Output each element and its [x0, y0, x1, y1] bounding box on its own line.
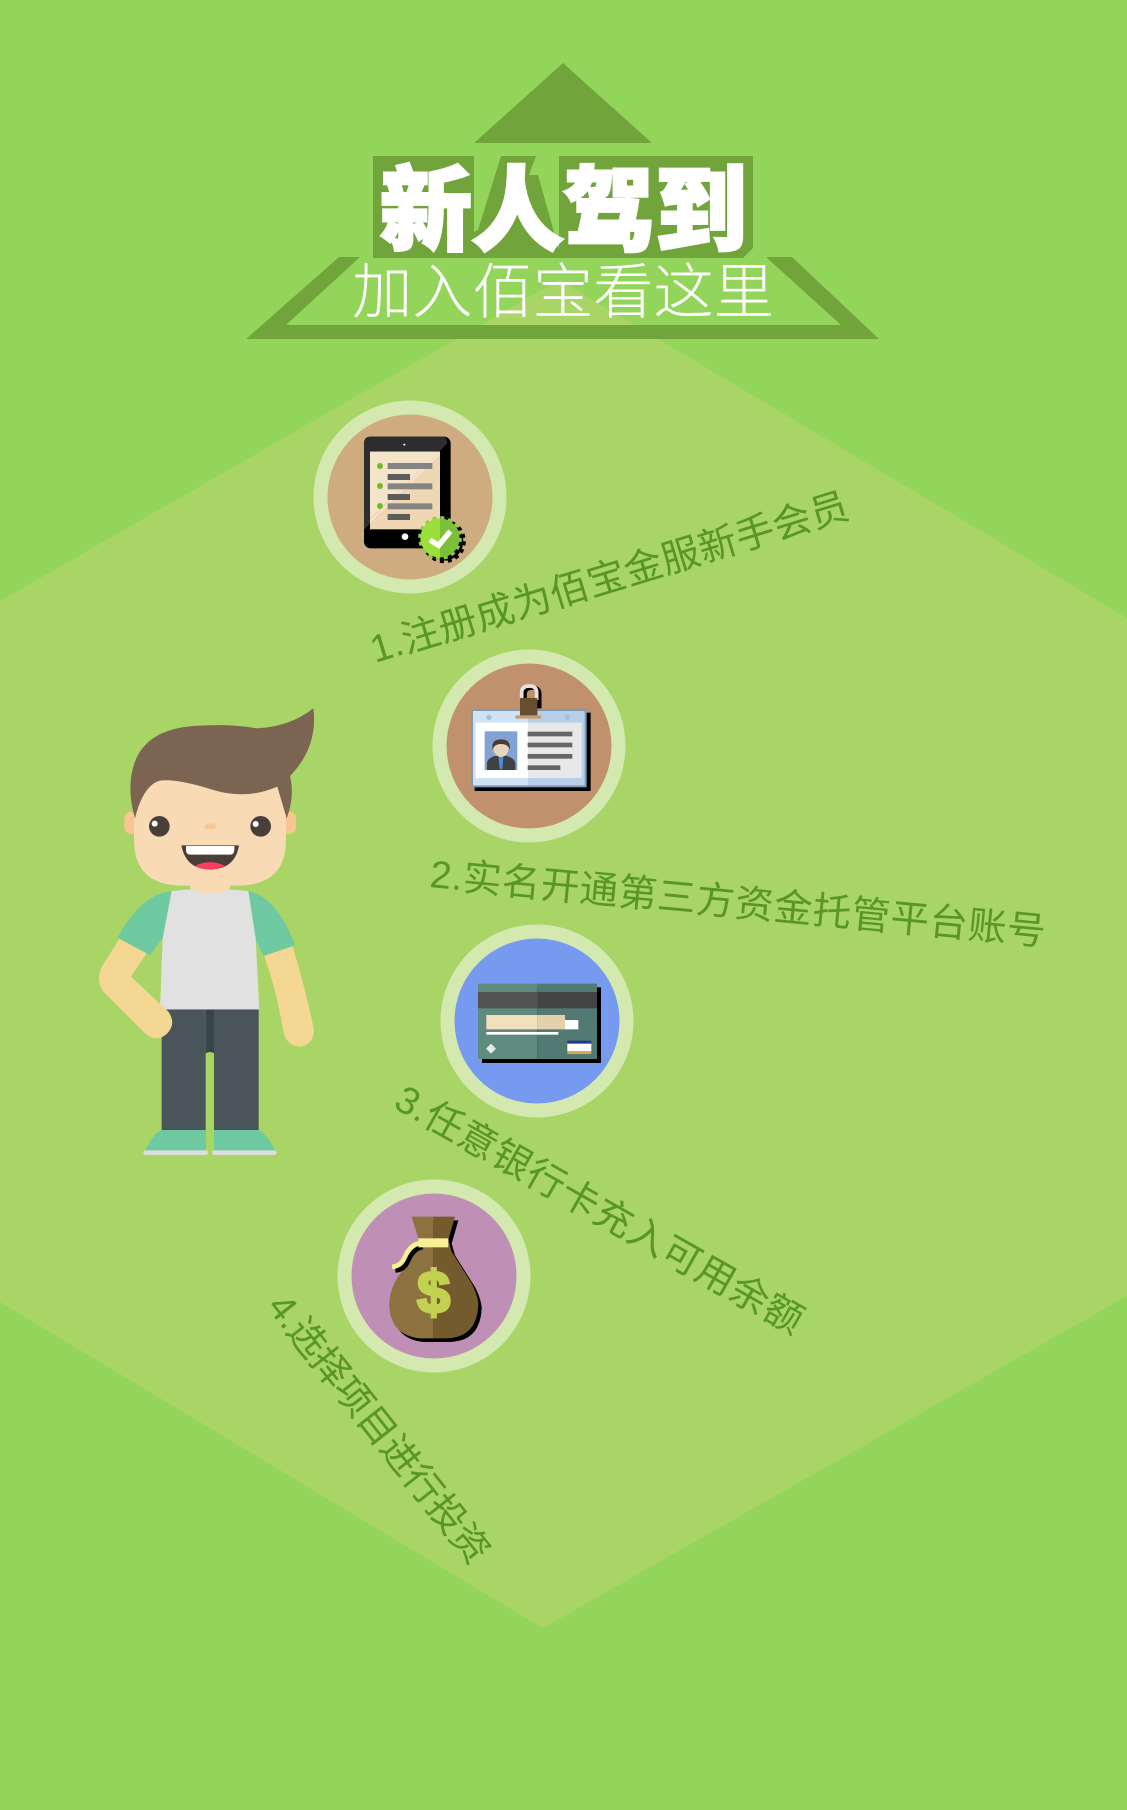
eyes	[149, 816, 271, 837]
step 3 label: 3.任意银行卡充入可用余额	[388, 1077, 811, 1343]
right arm	[264, 947, 314, 1047]
left arm	[99, 939, 172, 1038]
shoes	[143, 1130, 277, 1155]
title backing	[373, 156, 753, 258]
top triangle	[474, 63, 652, 143]
hair	[130, 708, 314, 818]
step 4 icon: money bag	[338, 1180, 530, 1372]
ears	[124, 812, 296, 834]
step 2 label: 2.实名开通第三方资金托管平台账号	[428, 853, 1047, 954]
face	[134, 773, 286, 886]
step 1 icon: tablet	[314, 400, 506, 594]
step 4 icon: money bag: $	[417, 1259, 450, 1326]
neck	[190, 877, 230, 894]
title: 新人驾到	[380, 161, 747, 263]
trousers	[162, 1009, 259, 1130]
character: boy	[99, 708, 314, 1155]
sleeves	[118, 891, 295, 956]
step 3 icon: bank card	[440, 924, 634, 1118]
title base frame	[246, 257, 879, 339]
subtitle: 加入佰宝看这里	[352, 259, 774, 326]
shirt	[160, 889, 259, 1009]
step 2 icon: id card	[432, 650, 626, 842]
hexagon panel	[0, 280, 1127, 1628]
step 4 label: 4.选择项目进行投资	[259, 1287, 497, 1572]
nose	[204, 824, 216, 829]
mouth	[181, 845, 239, 869]
step 1 label: 1.注册成为佰宝金服新手会员	[365, 485, 854, 672]
